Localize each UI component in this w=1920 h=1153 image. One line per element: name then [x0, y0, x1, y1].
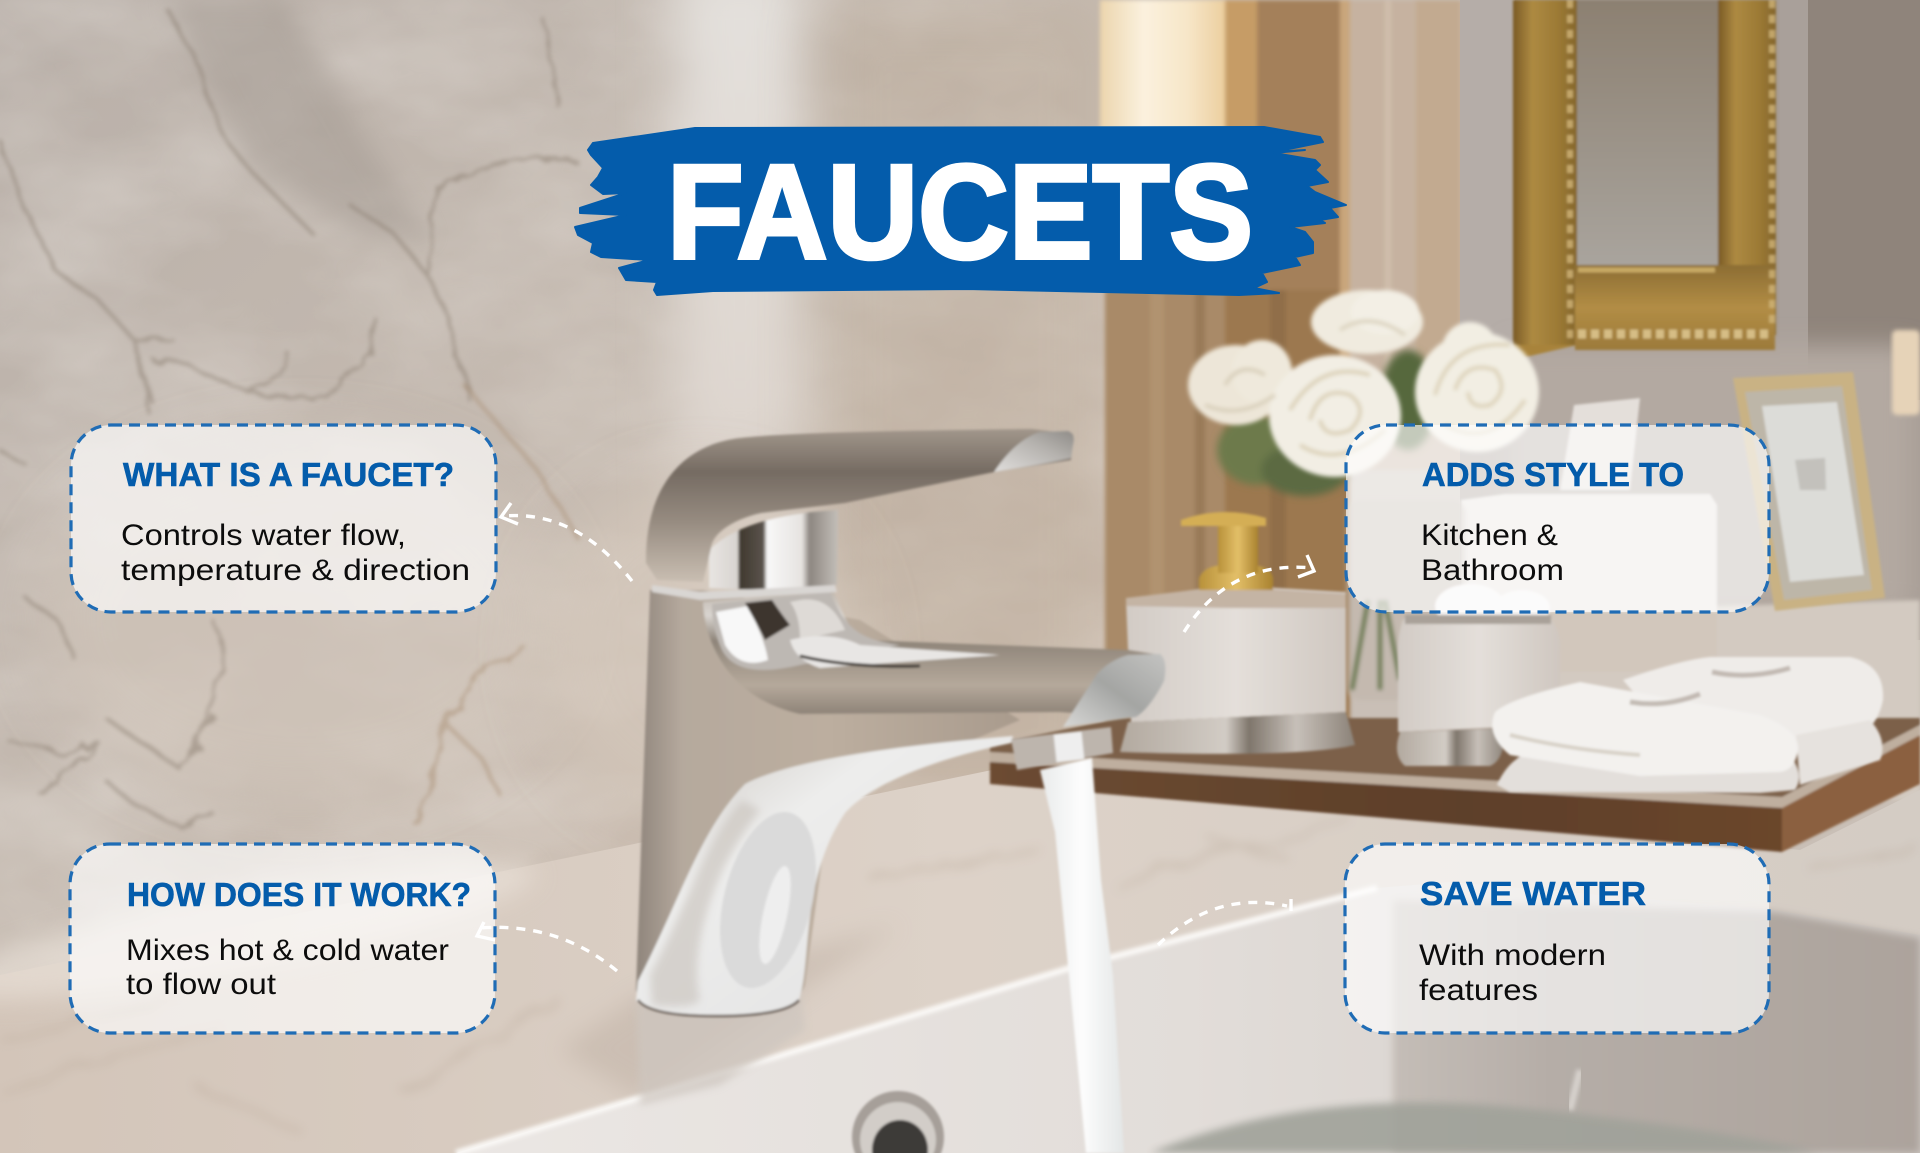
white sink	[456, 882, 1920, 1153]
body text: temperature & direction	[121, 554, 470, 587]
body text: Controls water flow,	[121, 519, 406, 552]
body text: Bathroom	[1421, 554, 1564, 587]
sink overflow drain	[852, 1091, 944, 1153]
body text: features	[1419, 974, 1538, 1007]
chrome faucet	[636, 429, 1165, 1016]
title text: FAUCETS	[667, 138, 1253, 287]
arrow: faucet handle to what is a faucet	[501, 503, 632, 581]
heading: HOW DOES IT WORK?	[127, 876, 471, 913]
aerator	[1011, 727, 1113, 770]
panel: save water	[1345, 844, 1769, 1033]
glass vase with stems	[1346, 500, 1466, 700]
spout recess	[704, 802, 832, 998]
collar	[709, 510, 838, 589]
wooden tray	[990, 718, 1920, 852]
body text	[121, 519, 470, 587]
marble counter	[0, 770, 1920, 1153]
panel: adds style to	[1346, 425, 1769, 612]
heading: ADDS STYLE TO	[1422, 456, 1684, 493]
panel: what is a faucet	[71, 425, 496, 612]
faucet base shadow line	[638, 1000, 799, 1016]
back counter on the right	[1400, 600, 1920, 800]
blue brush stroke	[575, 127, 1346, 295]
ceramic jar with cotton	[1397, 584, 1560, 766]
faucet body	[636, 590, 1020, 1016]
collar ring	[652, 585, 837, 600]
aerator highlight	[1054, 732, 1084, 762]
body text: Kitchen &	[1421, 519, 1558, 552]
arrow: faucet body to how does it work	[477, 922, 617, 971]
arrow: faucet to adds style	[1184, 555, 1314, 632]
gold mirror	[1513, 0, 1776, 360]
chrome left shading	[650, 800, 760, 1007]
title banner	[575, 127, 1346, 295]
heading: SAVE WATER	[1420, 875, 1646, 912]
lever handle	[646, 429, 1073, 582]
picture frame	[1733, 372, 1885, 611]
chrome bulb	[712, 592, 1000, 670]
lever end cap	[994, 431, 1074, 472]
running water	[1040, 758, 1124, 1153]
upper spout bar	[703, 590, 1160, 717]
body text	[1421, 519, 1564, 587]
tissue box	[1461, 398, 1717, 672]
heading: WHAT IS A FAUCET?	[123, 456, 454, 493]
arrow: water to save water	[1158, 899, 1291, 945]
counter reflection under faucet	[636, 990, 805, 1105]
spout end cap	[1063, 654, 1165, 727]
window light and curtains	[1100, 0, 1470, 770]
folded towels	[1492, 657, 1883, 793]
white roses	[1188, 290, 1539, 496]
marble wall	[0, 0, 1140, 1000]
right wall	[1460, 0, 1920, 640]
lower chrome spout	[636, 736, 1013, 1015]
body text	[1419, 939, 1606, 1007]
candle	[1892, 330, 1920, 415]
body text: to flow out	[126, 968, 277, 1001]
body text: With modern	[1419, 939, 1606, 972]
body text	[126, 934, 449, 1001]
panel: how does it work	[70, 844, 495, 1033]
soap dispenser	[1120, 512, 1355, 754]
body text: Mixes hot & cold water	[126, 934, 449, 967]
